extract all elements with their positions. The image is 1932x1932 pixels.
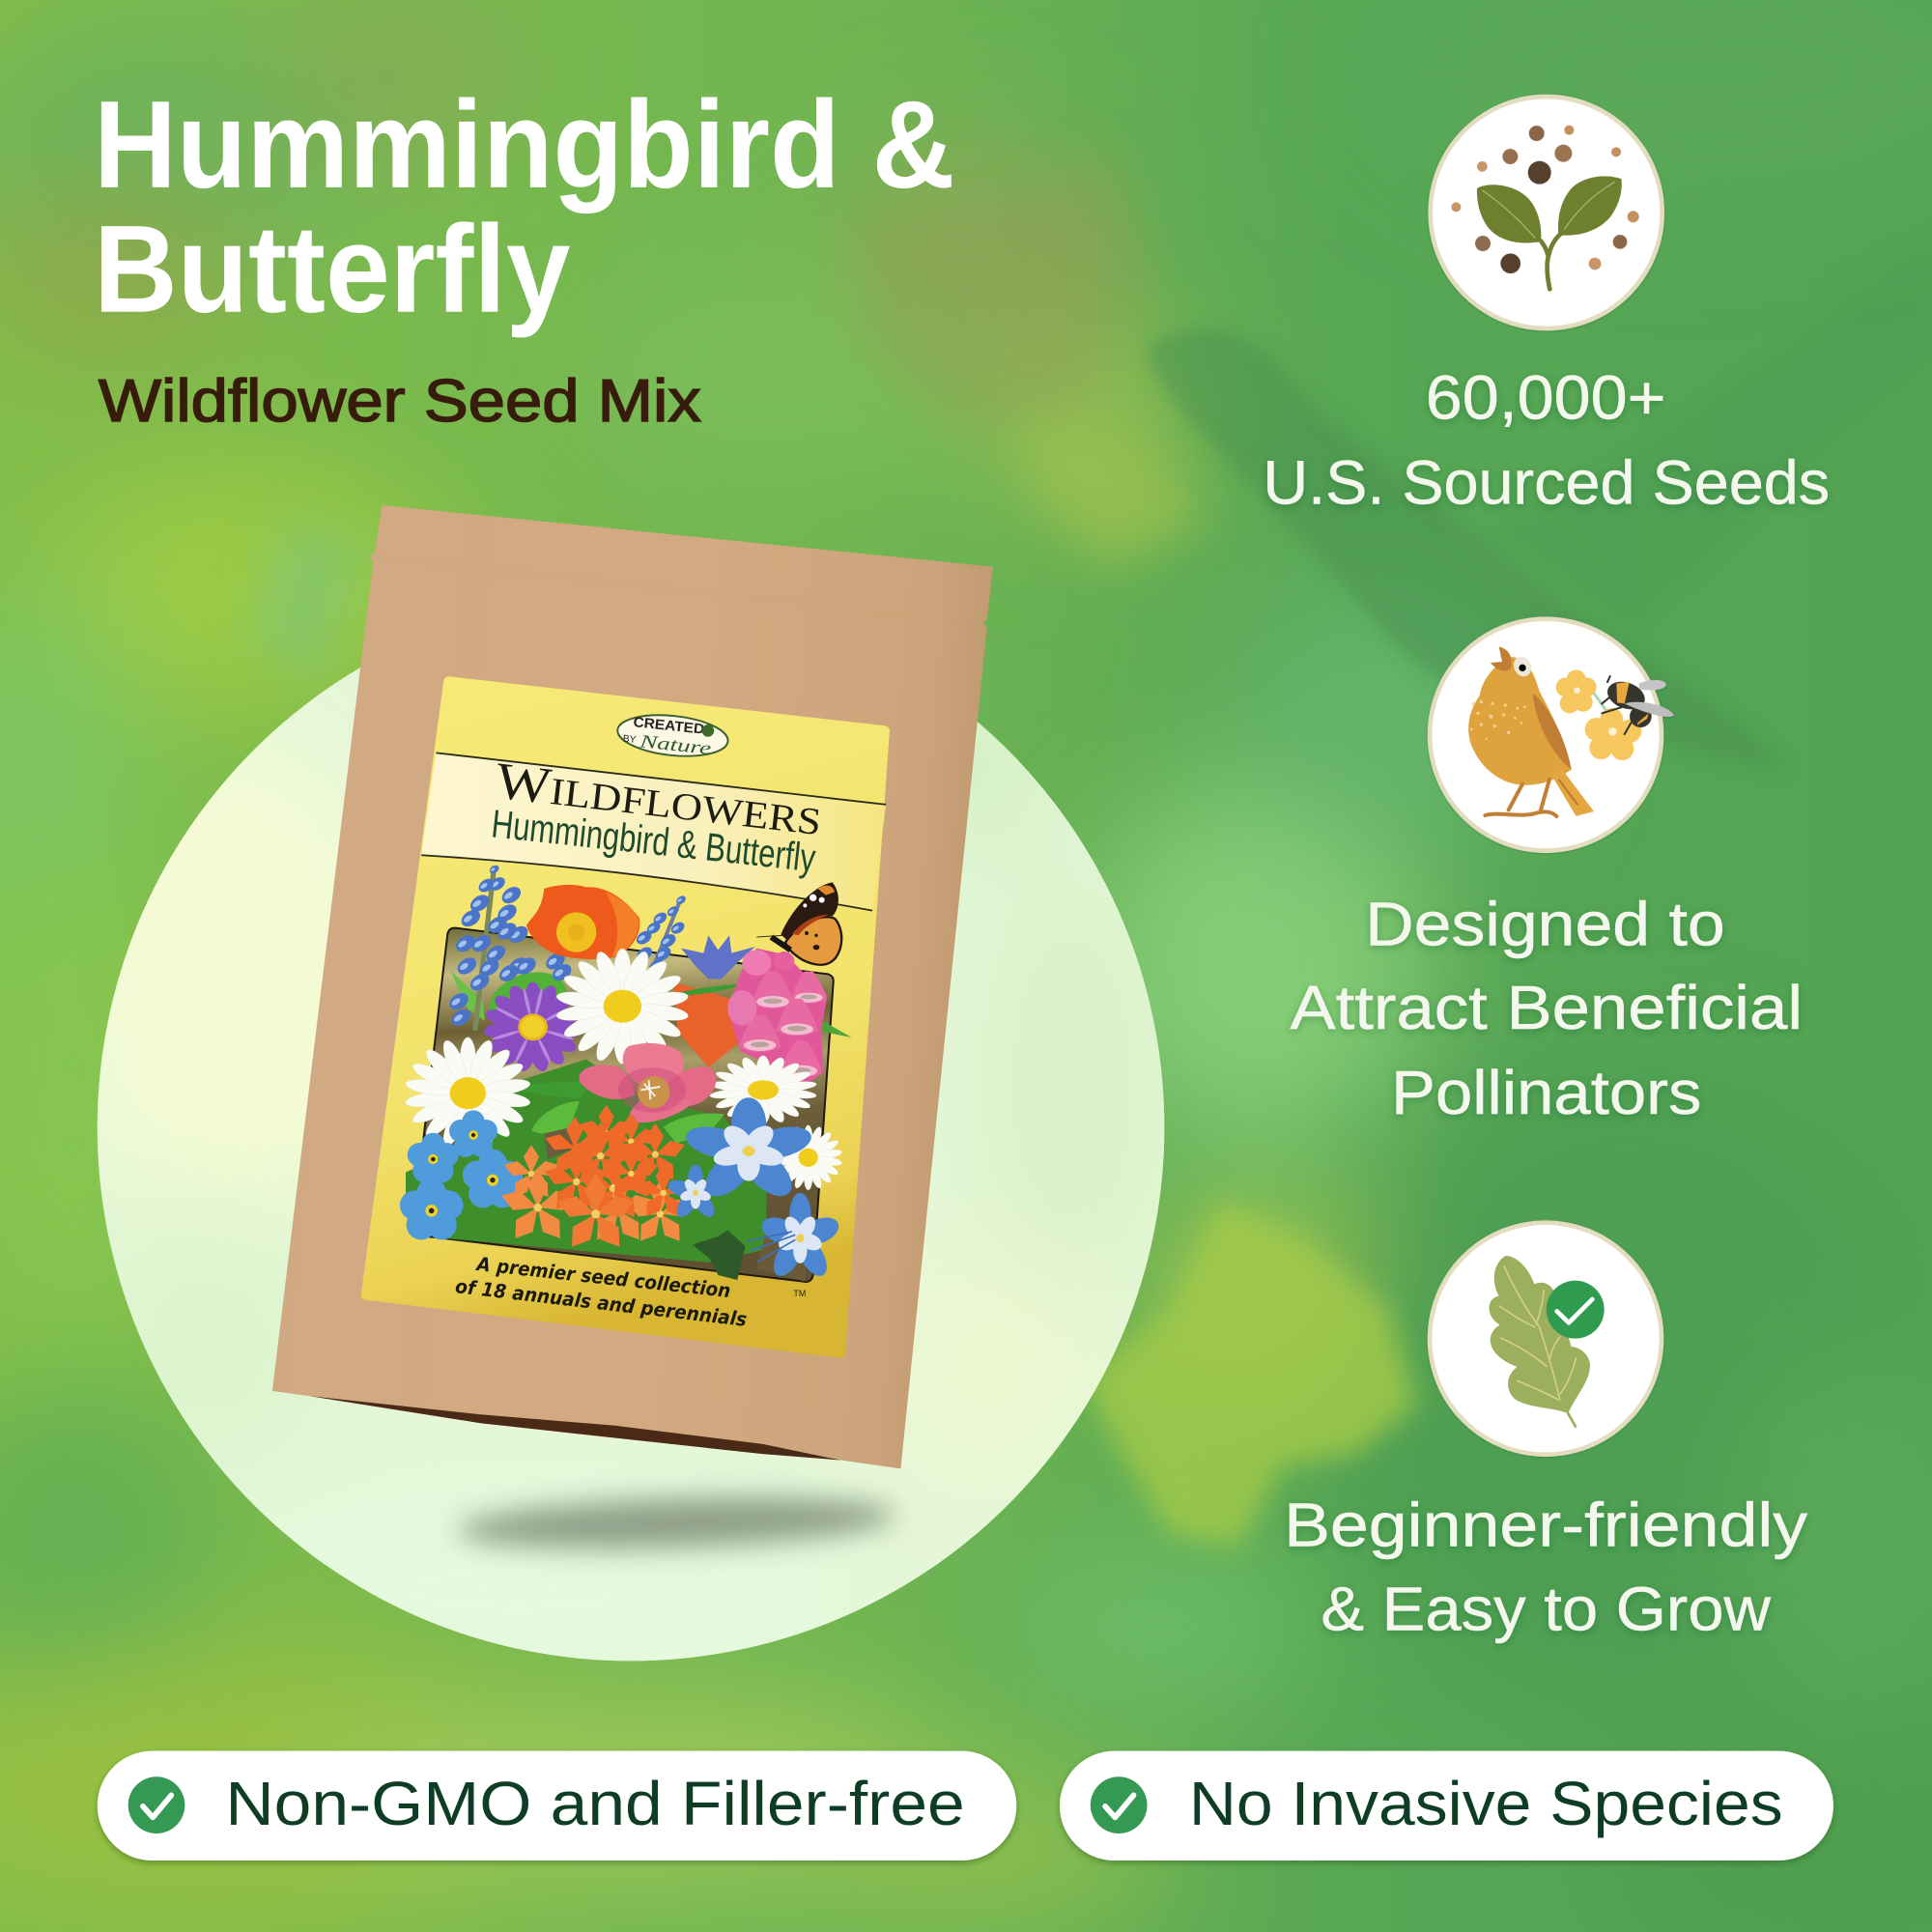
badge text: No Invasive Species <box>1189 1769 1783 1838</box>
left lupine <box>446 864 575 1031</box>
right end daisy <box>774 1125 842 1190</box>
lime foliage patch <box>1084 1202 1417 1547</box>
label tagline <box>454 1253 749 1331</box>
trademark: TM <box>793 1289 806 1298</box>
orange star flowers <box>498 1105 695 1253</box>
behind-pink daisy <box>709 1056 817 1124</box>
label tagline: A premier seed collection <box>474 1253 731 1302</box>
large daisy <box>555 949 690 1064</box>
label sub-heading: Hummingbird & Butterfly <box>490 801 818 880</box>
pollinators caption: Pollinators <box>1391 1058 1701 1127</box>
badge: non-GMO <box>98 1750 1016 1861</box>
pollinators caption: Designed to <box>1365 889 1725 958</box>
icon: bird, flowers and bee <box>1430 619 1674 851</box>
icon: oak leaf with check <box>1430 1223 1662 1455</box>
title: Hummingbird & <box>94 75 955 214</box>
brand logo: BY <box>622 734 637 746</box>
label tagline: of 18 annuals and perennials <box>454 1275 749 1331</box>
left daisy <box>405 1037 531 1150</box>
feature: seeds <box>1263 97 1830 518</box>
feature: pollinators <box>1290 619 1803 1127</box>
title: Butterfly <box>94 200 571 339</box>
icon: seedling and seeds <box>1431 97 1662 328</box>
badge: no invasive species <box>1060 1750 1833 1861</box>
badge text: Non-GMO and Filler-free <box>225 1769 965 1838</box>
pollinators caption <box>1290 889 1803 1127</box>
pale glowing circle behind pouch <box>74 594 1164 1663</box>
easy to grow caption <box>1284 1491 1807 1644</box>
feature: easy to grow <box>1284 1223 1807 1644</box>
flower window <box>412 928 834 1282</box>
icon: check <box>128 1776 185 1833</box>
cornflower <box>676 935 755 996</box>
easy to grow caption: Beginner-friendly <box>1284 1491 1807 1560</box>
brand logo: Nature <box>638 731 713 759</box>
flower bouquet illustration <box>400 864 852 1282</box>
seeds caption: 60,000+ <box>1426 363 1665 433</box>
columbine stamens and dark leaf <box>693 1230 795 1280</box>
icon: check <box>1091 1776 1148 1833</box>
butterfly <box>756 882 841 965</box>
seeds caption: U.S. Sourced Seeds <box>1263 448 1830 518</box>
seeds caption <box>1263 363 1830 518</box>
columbines <box>681 1097 816 1203</box>
label heading: WILDFLOWERS <box>493 752 825 846</box>
subtitle: Wildflower Seed Mix <box>99 367 701 435</box>
bag bottom fold <box>309 1396 840 1460</box>
orange paintbrush <box>673 982 742 1067</box>
purple aster <box>483 982 583 1073</box>
poppy <box>526 885 639 959</box>
foxglove <box>727 949 828 1090</box>
brand logo <box>615 710 730 761</box>
forget-me-nots <box>449 1110 497 1157</box>
brand logo: CREATED <box>633 715 705 738</box>
pouch ground shadow <box>456 1491 896 1555</box>
seed pouch <box>272 505 993 1468</box>
pink flower <box>580 1043 716 1122</box>
bag seal crease <box>377 557 985 623</box>
foliage <box>406 962 852 1282</box>
right lupine <box>634 895 687 976</box>
yellow label <box>366 681 885 1353</box>
title <box>94 75 955 339</box>
pollinators caption: Attract Beneficial <box>1290 973 1803 1042</box>
easy to grow caption: & Easy to Grow <box>1321 1574 1772 1643</box>
cream name band <box>421 753 886 911</box>
kraft bag body <box>272 505 993 1468</box>
hummingbird silhouette <box>1146 246 1932 770</box>
